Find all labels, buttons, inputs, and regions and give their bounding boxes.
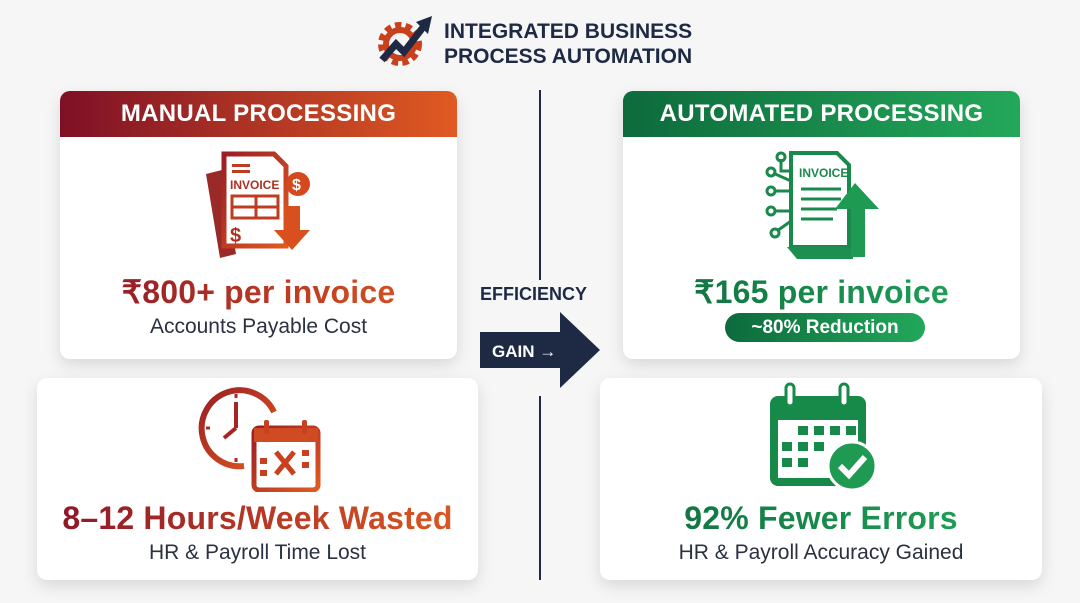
badge: reduction bbox=[725, 313, 925, 342]
metric: 165 per invoice bbox=[623, 273, 1020, 311]
title bbox=[378, 16, 692, 68]
panel: manual processing bbox=[60, 91, 457, 359]
metric: fewer errors bbox=[600, 500, 1042, 537]
icon: calendar check bbox=[770, 382, 874, 488]
label: HR & Payroll Accuracy Gained bbox=[679, 541, 963, 564]
header: automated: AUTOMATED PROCESSING bbox=[660, 100, 983, 127]
label: Accounts Payable Cost bbox=[150, 315, 367, 338]
panel: fewer errors bbox=[600, 378, 1042, 580]
icon: gear with arrow bbox=[378, 16, 432, 66]
arrow shape bbox=[480, 312, 600, 388]
label: efficiency: EFFICIENCY bbox=[480, 284, 587, 304]
metric: 165 per invoice: ₹165 per invoice bbox=[694, 274, 949, 310]
title text: PROCESS AUTOMATION bbox=[444, 45, 692, 68]
icon: invoice up circuit bbox=[766, 151, 879, 259]
header: automated bbox=[623, 91, 1020, 137]
metric: fewer errors: 92% Fewer Errors bbox=[684, 500, 958, 536]
icon: clock calendar bbox=[198, 387, 320, 492]
metric: hours wasted: 8–12 Hours/Week Wasted bbox=[62, 500, 453, 536]
title text: INTEGRATED BUSINESS bbox=[444, 20, 692, 43]
metric: 800 per invoice bbox=[60, 273, 457, 311]
icon: invoice down: $ bbox=[292, 177, 301, 194]
divider lines bbox=[539, 90, 541, 280]
header: manual bbox=[60, 91, 457, 137]
panel: hours wasted bbox=[37, 378, 478, 580]
badge: reduction: ~80% Reduction bbox=[751, 317, 899, 338]
panel: automated processing bbox=[623, 91, 1020, 359]
icon: invoice up circuit: INVOICE bbox=[799, 166, 848, 180]
icon: invoice down: INVOICE bbox=[230, 178, 279, 192]
arrow shape: GAIN → bbox=[492, 342, 556, 361]
arrow: efficiency gain bbox=[480, 284, 600, 388]
title text bbox=[444, 20, 692, 68]
icon: invoice down bbox=[206, 152, 310, 258]
icon: invoice down: $ bbox=[230, 225, 241, 247]
label: HR & Payroll Time Lost bbox=[149, 541, 366, 564]
header: manual: MANUAL PROCESSING bbox=[121, 100, 396, 127]
metric: 800 per invoice: ₹800+ per invoice bbox=[122, 274, 395, 310]
